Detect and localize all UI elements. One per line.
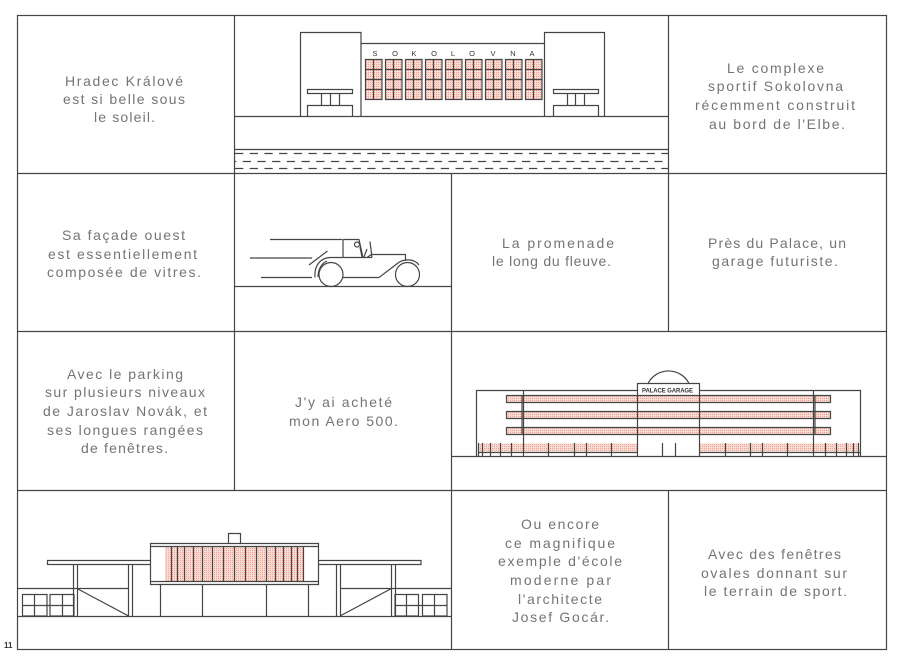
text: Palace garage: Près du Palace, un bbox=[708, 235, 846, 251]
text: façade ouest bbox=[47, 227, 201, 280]
text: Aero 500: mon Aero 500. bbox=[289, 413, 398, 429]
road bbox=[235, 148, 669, 150]
driver bbox=[354, 242, 360, 247]
text: parking Jaroslav Novák: sur plusieurs niveaux bbox=[45, 384, 205, 400]
text: façade ouest: composée de vitres. bbox=[47, 264, 201, 280]
text: école moderne Josef Gočár: moderne par bbox=[510, 572, 611, 588]
page number: 11 bbox=[4, 641, 13, 650]
facade mullions bbox=[172, 546, 304, 582]
glazed facade bbox=[165, 546, 304, 582]
ground bbox=[235, 286, 451, 288]
illustration: speeding car bbox=[235, 240, 451, 286]
ground-floor windows bbox=[22, 594, 447, 616]
building structure bbox=[451, 371, 886, 456]
text: La promenade: La promenade bbox=[502, 235, 614, 251]
text: école moderne Josef Gočár: Josef Gocár. bbox=[512, 609, 609, 625]
text: parking Jaroslav Novák: de Jaroslav Novák, et bbox=[43, 403, 207, 419]
sign: SOKOLOVNA: N bbox=[510, 49, 516, 58]
sign: SOKOLOVNA: S bbox=[372, 49, 378, 58]
text: parking Jaroslav Novák: ses longues rangées bbox=[47, 422, 203, 438]
text: parking Jaroslav Novák bbox=[43, 366, 207, 456]
sign: Palace Garage: PALACE GARAGE bbox=[642, 388, 693, 394]
windows bbox=[366, 60, 542, 100]
text: fenêtres ovales: le terrain de sport. bbox=[704, 583, 847, 599]
speed lines bbox=[250, 240, 342, 278]
sign: SOKOLOVNA: V bbox=[490, 49, 496, 58]
sign: SOKOLOVNA bbox=[372, 49, 535, 58]
text: Aero 500: J'y ai acheté bbox=[295, 394, 392, 410]
sign: SOKOLOVNA: L bbox=[451, 49, 455, 58]
text: complexe Sokolovna: au bord de l'Elbe. bbox=[709, 116, 845, 132]
text: La promenade: le long du fleuve. bbox=[492, 253, 611, 269]
sign: SOKOLOVNA: K bbox=[411, 49, 417, 58]
window bands bbox=[478, 396, 858, 452]
entrance canopies bbox=[308, 90, 598, 116]
sign: SOKOLOVNA: O bbox=[469, 49, 475, 58]
illustration: modernist school by Josef Gočár bbox=[17, 534, 451, 616]
text: Aero 500 bbox=[289, 394, 398, 429]
text: La promenade bbox=[492, 235, 614, 269]
wings and pillars bbox=[17, 560, 451, 616]
text: fenêtres ovales: ovales donnant sur bbox=[701, 565, 847, 581]
sign: SOKOLOVNA: O bbox=[431, 49, 437, 58]
central volume bbox=[150, 534, 318, 584]
car body bbox=[315, 240, 419, 278]
text: Palace garage: garage futuriste. bbox=[712, 253, 838, 269]
text: complexe Sokolovna: récemment construit bbox=[695, 97, 855, 113]
text: complexe Sokolovna: sportif Sokolovna bbox=[708, 78, 843, 94]
text: Hradec Králové: Hradec Králové bbox=[65, 73, 183, 89]
building outline bbox=[235, 32, 669, 116]
text: complexe Sokolovna: Le complexe bbox=[727, 60, 824, 76]
text: façade ouest: est essentiellement bbox=[48, 246, 197, 262]
text: parking Jaroslav Novák: Avec le parking bbox=[67, 366, 183, 382]
text: école moderne Josef Gočár: Ou encore bbox=[521, 516, 599, 532]
text: Hradec Králové bbox=[63, 73, 185, 125]
text: école moderne Josef Gočár: ce magnifique bbox=[505, 535, 615, 551]
text: fenêtres ovales: Avec des fenêtres bbox=[708, 546, 841, 562]
text: complexe Sokolovna bbox=[695, 60, 855, 132]
text: fenêtres ovales bbox=[701, 546, 847, 599]
text: école moderne Josef Gočár: exemple d'école bbox=[498, 553, 622, 569]
text: Hradec Králové: le soleil. bbox=[94, 109, 155, 125]
text: parking Jaroslav Novák: de fenêtres. bbox=[81, 440, 168, 456]
text: Hradec Králové: est si belle sous bbox=[63, 91, 185, 107]
sign: SOKOLOVNA: A bbox=[529, 49, 535, 58]
sign: SOKOLOVNA: O bbox=[392, 49, 398, 58]
text: Palace garage bbox=[708, 235, 846, 269]
illustration: Sokolovna sports complex bbox=[235, 32, 669, 168]
illustration: Palace Garage bbox=[451, 371, 886, 456]
text: école moderne Josef Gočár: l'architecte bbox=[518, 591, 602, 607]
text: école moderne Josef Gočár bbox=[498, 516, 622, 625]
wheels bbox=[319, 262, 343, 286]
text: façade ouest: Sa façade ouest bbox=[62, 227, 185, 243]
